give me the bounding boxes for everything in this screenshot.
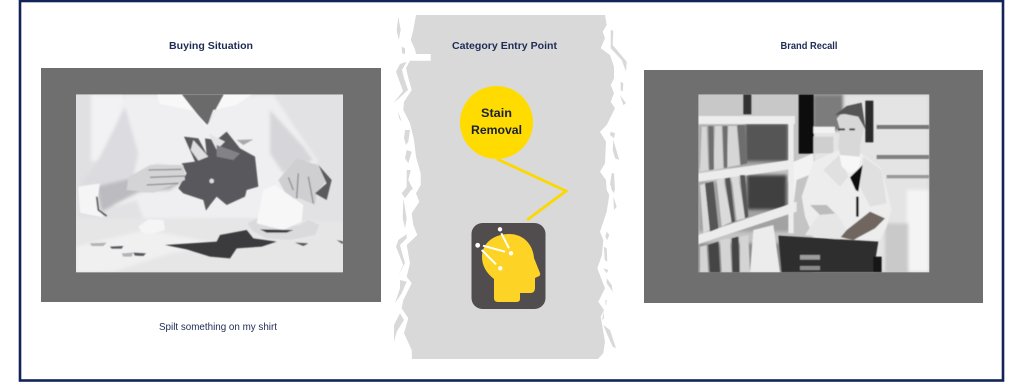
connector line (497, 159, 566, 220)
panel: category entry point (393, 15, 627, 359)
callout: stain removal (460, 86, 533, 159)
caption: spilt something: Spilt something on my shirt (159, 321, 277, 333)
torn paper background (402, 15, 615, 359)
photo: coffee spilt on shirt (76, 94, 343, 272)
callout: stain removal: Removal (471, 123, 522, 137)
heading: buying situation: Buying Situation (169, 40, 253, 52)
torn fragments: right (602, 30, 627, 348)
callout: stain removal: Stain (481, 106, 512, 120)
icon: head with memory links (472, 223, 546, 309)
photo: shopper in supermarket aisle (698, 94, 929, 273)
photo frame: left (41, 68, 381, 302)
heading: brand recall: Brand Recall (780, 40, 838, 52)
heading: category entry point: Category Entry Point (452, 40, 557, 52)
panel: buying situation (41, 40, 381, 333)
panel: brand recall (644, 40, 983, 303)
photo frame: right (644, 70, 983, 303)
torn fragments: left (393, 17, 413, 342)
